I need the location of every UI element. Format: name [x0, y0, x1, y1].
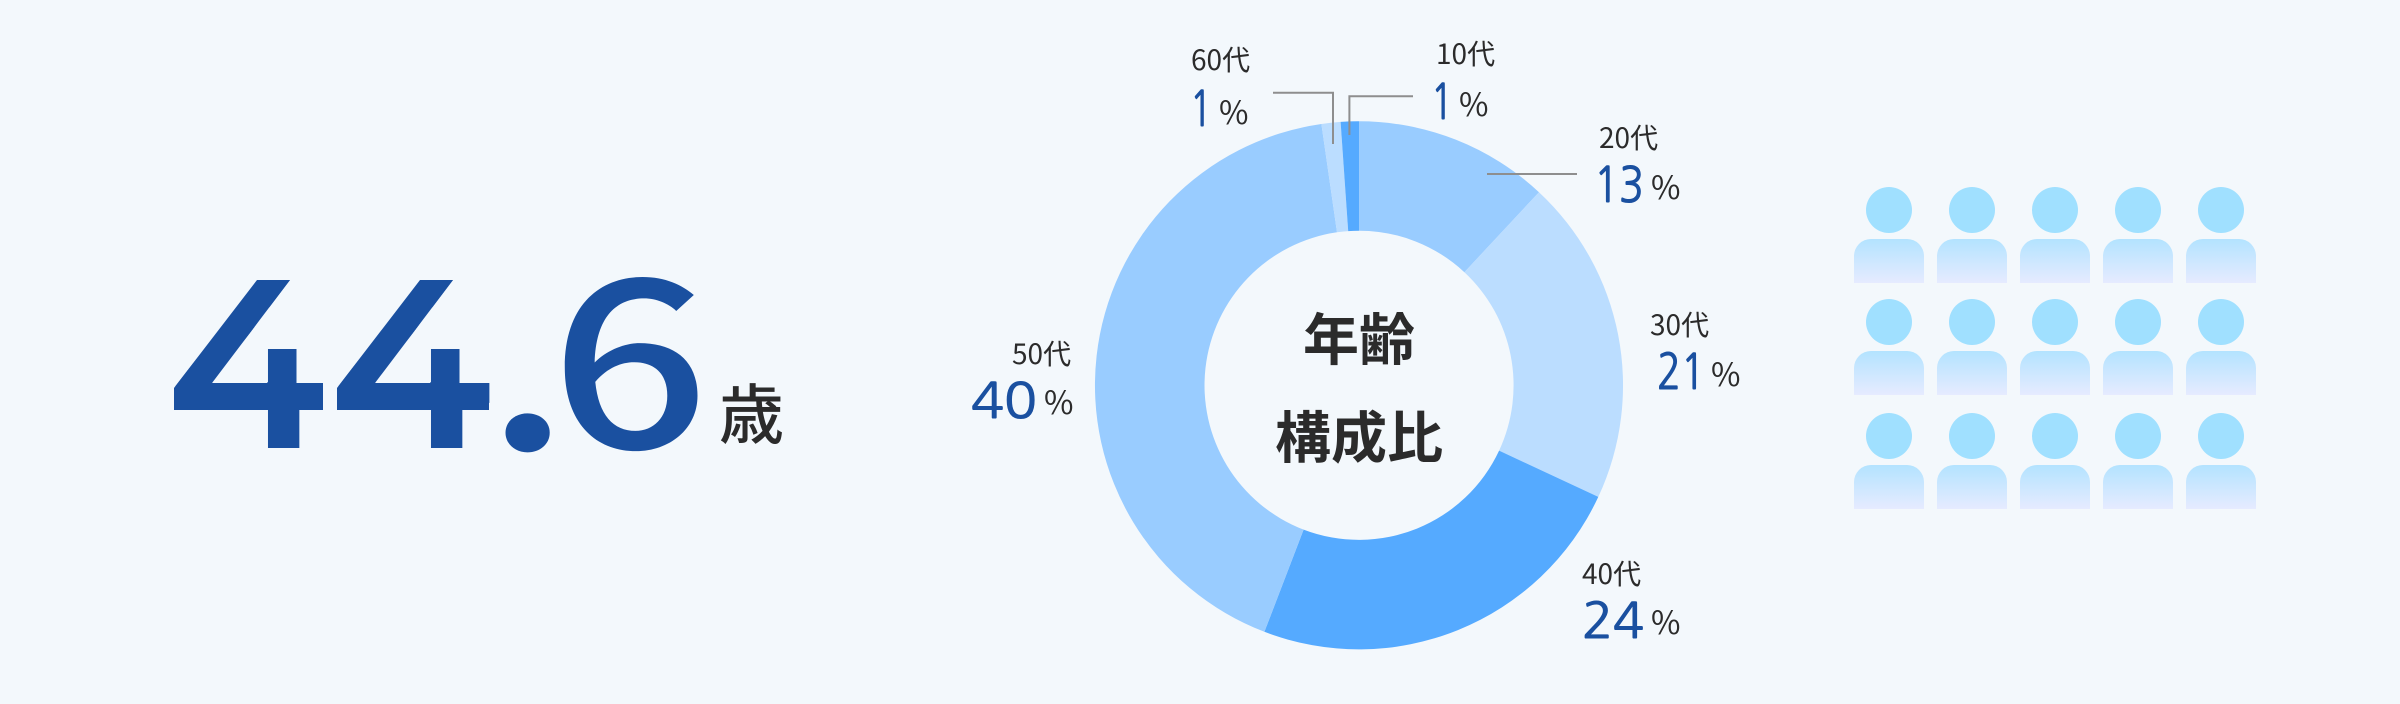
segment: 20s 13%: [1359, 121, 1539, 272]
leader line: 20s: [1487, 173, 1577, 175]
label: 60s 1%: [1190, 39, 1250, 134]
label: 30s 21%: [1650, 304, 1740, 397]
label: 50s 40%: %: [1044, 378, 1073, 424]
leader line: 60s: [1273, 93, 1333, 144]
label: 10s 1%: 1: [1431, 78, 1453, 127]
label: 50s 40%: [971, 333, 1073, 426]
label: 40s 24%: [1582, 553, 1680, 646]
age unit: 歳: [719, 363, 784, 457]
average age figure: [160, 172, 709, 518]
average age figure: .: [485, 172, 570, 518]
row 1 people: [1854, 187, 2256, 283]
label: 20s 13%: %: [1651, 163, 1680, 209]
leader line: 10s: [1349, 96, 1413, 135]
segment: 50s 40%: [1095, 124, 1337, 632]
segment: 40s 24%: [1264, 451, 1598, 649]
label: 40s 24%: 40代: [1582, 553, 1641, 593]
donut centre title: 年齢: [1303, 296, 1415, 377]
average age figure: 4: [169, 184, 335, 514]
label: 20s 13%: 13: [1594, 161, 1644, 210]
label: 60s 1%: 60代: [1191, 39, 1250, 79]
row 2 people: [1854, 299, 2256, 395]
donut centre title: 構成比: [1275, 394, 1443, 475]
label: 20s 13%: [1594, 117, 1680, 210]
label: 20s 13%: 20代: [1599, 117, 1658, 157]
donut chart: age composition: [1095, 121, 1623, 649]
segment: 10s 1%: [1341, 121, 1359, 231]
label: 30s 21%: 21: [1657, 348, 1705, 397]
label: 40s 24%: %: [1651, 598, 1680, 644]
label: 10s 1%: 10代: [1436, 33, 1495, 73]
donut centre title: [1275, 296, 1443, 475]
average age figure: 4: [332, 184, 498, 514]
row 3 people: [1854, 413, 2256, 509]
label: 10s 1%: [1431, 33, 1495, 127]
average age figure: 6: [550, 184, 709, 514]
label: 50s 40%: 50代: [1012, 333, 1071, 373]
label: 40s 24%: 24: [1582, 597, 1644, 646]
label: 10s 1%: %: [1459, 80, 1488, 126]
label: 30s 21%: 30代: [1650, 304, 1709, 344]
label: 50s 40%: 40: [971, 377, 1037, 426]
segment: 30s 21%: [1464, 192, 1623, 497]
icon grid: people: [1854, 187, 2256, 509]
label: 30s 21%: %: [1711, 350, 1740, 396]
label: 60s 1%: %: [1219, 88, 1248, 134]
label: 60s 1%: 1: [1190, 85, 1212, 134]
segment: 60s 1%: [1321, 122, 1348, 232]
